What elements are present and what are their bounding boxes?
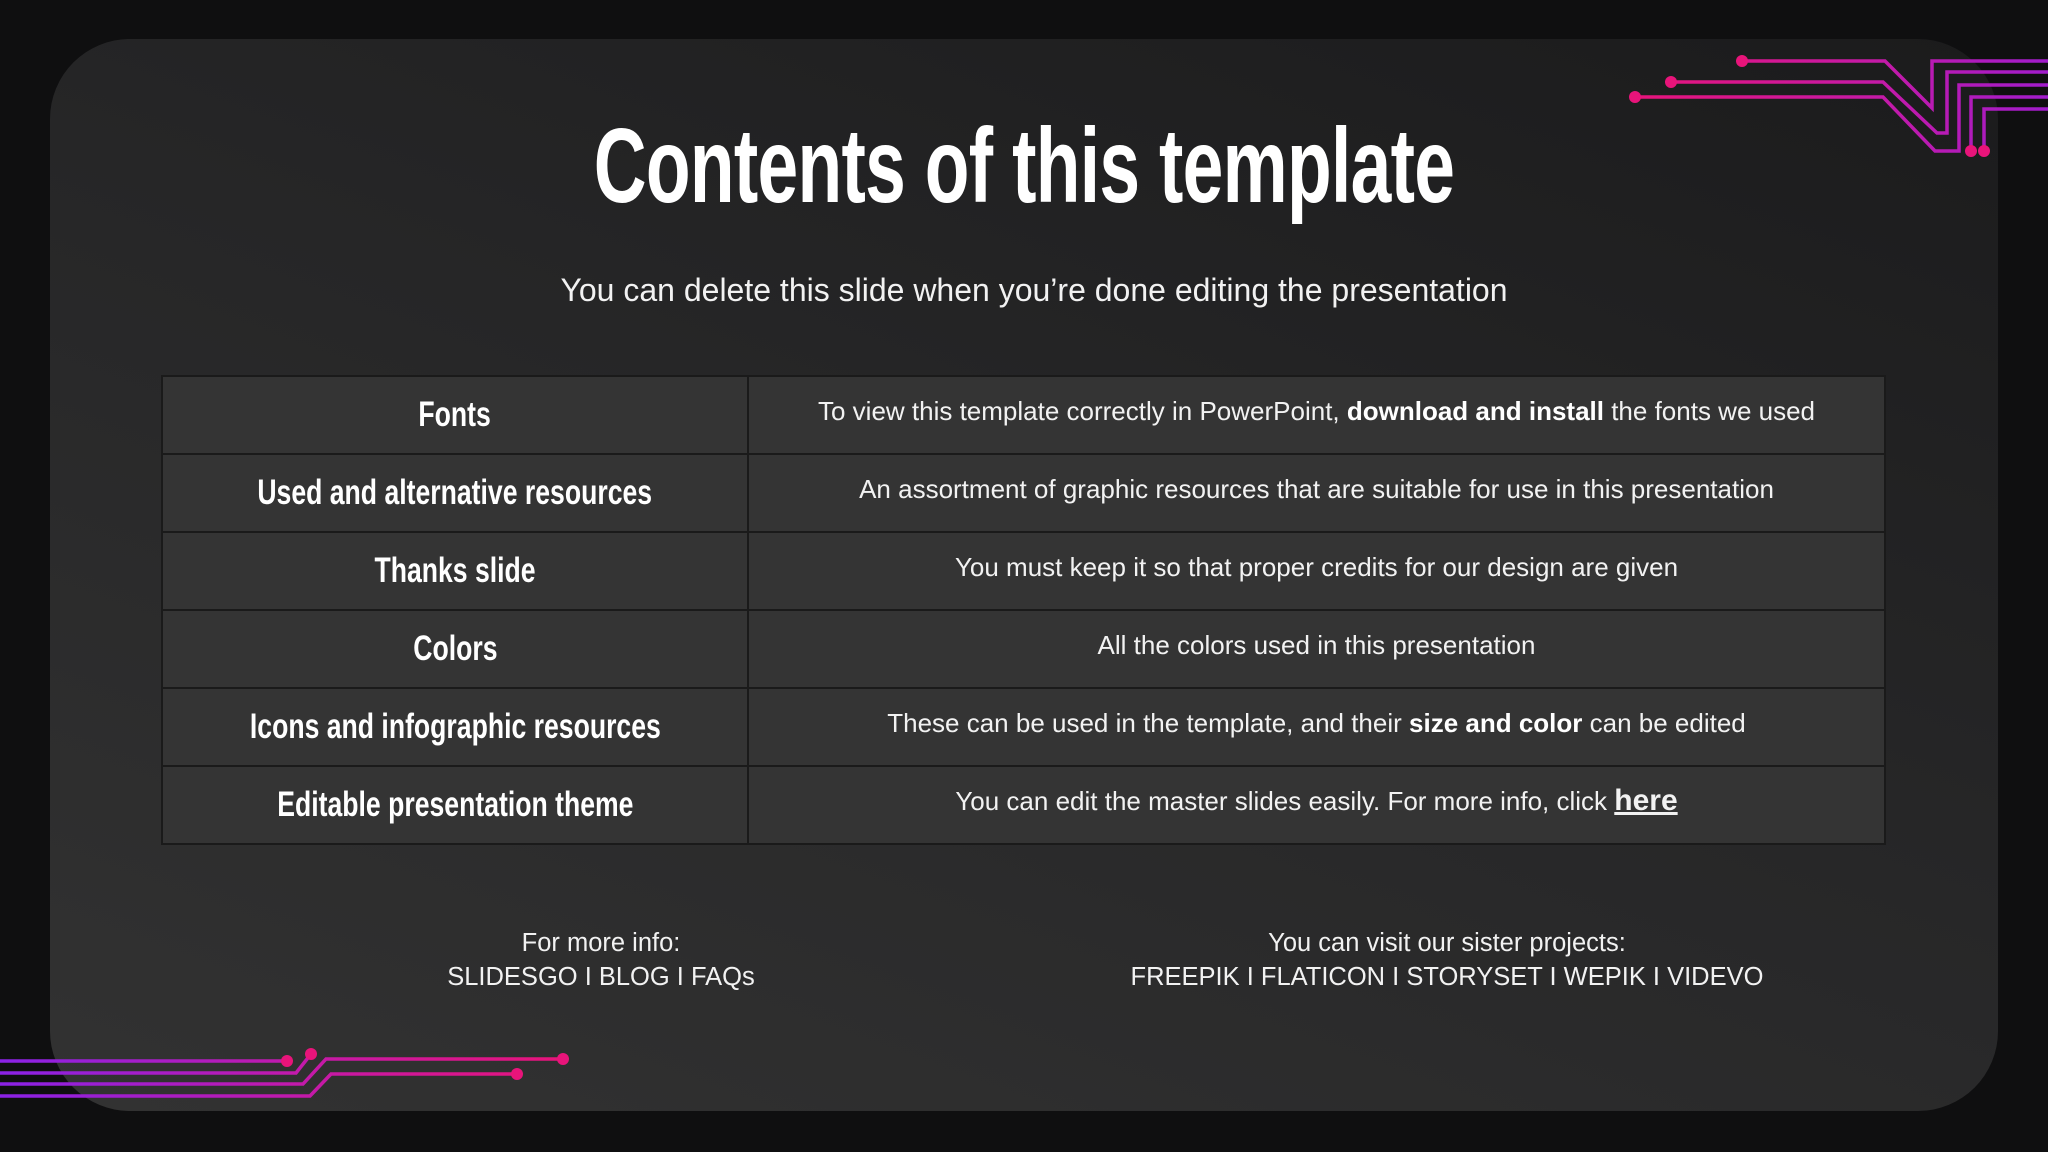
table of contents: All the colors used in this presentation [1098,630,1535,660]
table of contents: Icons and infographic resources [250,707,660,746]
subtitle: You can delete this slide when you’re done editing the presentation [560,272,1508,308]
table of contents: Colors [413,629,497,668]
table of contents: You must keep it so that proper credits for our design are given [955,552,1678,582]
table of contents: Used and alternative resources [258,473,652,512]
title: Contents of this template [594,107,1454,225]
table of contents: You can edit the master slides easily. For more info, click here [955,784,1678,817]
table of contents: Fonts [419,395,491,434]
footer: sister projects [1131,929,1763,991]
footer: sister projects: You can visit our sister projects: [1268,929,1626,957]
footer: more info [447,929,755,991]
table of contents: To view this template correctly in PowerPoint, download and install the fonts we used [818,396,1815,426]
table of contents: Editable presentation theme [277,785,633,824]
footer: sister projects: FREEPIK I FLATICON I STORYSET I WEPIK I VIDEVO [1131,963,1763,991]
footer: more info: For more info: [522,929,680,957]
table of contents: These can be used in the template, and their size and color can be edited [887,708,1746,738]
table of contents [161,375,1886,845]
footer: more info: SLIDESGO I BLOG I FAQs [447,963,755,991]
table of contents: Thanks slide [374,551,536,590]
table of contents: An assortment of graphic resources that are suitable for use in this presentation [859,474,1774,504]
